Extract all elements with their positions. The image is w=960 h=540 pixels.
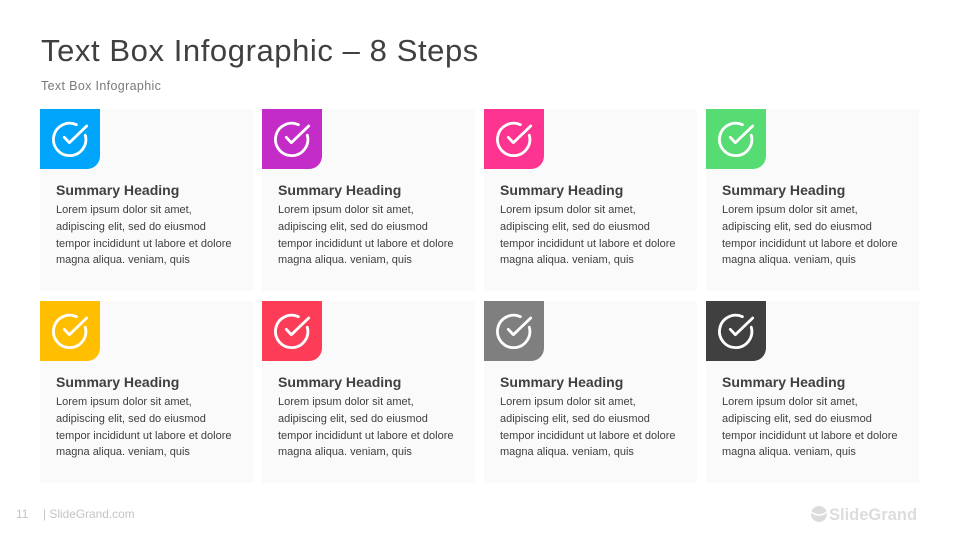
body text [278,396,454,458]
body text: Lorem ipsum dolor sit amet, [722,396,858,408]
body text: adipiscing elit, sed do eiusmod [56,221,206,233]
body text [500,204,676,266]
heading: Summary Heading [278,182,401,198]
heading: Summary Heading [500,182,623,198]
subtitle: Text Box Infographic [41,79,161,93]
body text [722,396,898,458]
body text: magna aliqua. veniam, quis [278,254,412,266]
body text: magna aliqua. veniam, quis [500,254,634,266]
body text: adipiscing elit, sed do eiusmod [56,413,206,425]
body text: tempor incididunt ut labore et dolore [56,238,232,250]
heading: Summary Heading [722,182,845,198]
body text: tempor incididunt ut labore et dolore [722,238,898,250]
icon: yellow check badge [40,301,100,361]
body text: adipiscing elit, sed do eiusmod [278,221,428,233]
panel: step 6 [262,301,475,483]
heading: Summary Heading [56,374,179,390]
icon: red check badge [262,301,322,361]
icon: blue check badge [40,109,100,169]
icon: dark check badge [706,301,766,361]
body text: magna aliqua. veniam, quis [278,446,412,458]
panel: step 4 [706,109,919,291]
body text [56,396,232,458]
heading: Summary Heading [500,374,623,390]
body text [278,204,454,266]
body text: adipiscing elit, sed do eiusmod [722,413,872,425]
panel: step 2 [262,109,475,291]
body text: tempor incididunt ut labore et dolore [278,430,454,442]
panel: step 3 [484,109,697,291]
icon: green check badge [706,109,766,169]
body text: adipiscing elit, sed do eiusmod [500,221,650,233]
body text [500,396,676,458]
page number: 11 [16,507,28,521]
body text: tempor incididunt ut labore et dolore [278,238,454,250]
body text: adipiscing elit, sed do eiusmod [722,221,872,233]
body text: magna aliqua. veniam, quis [56,254,190,266]
panel: step 8 [706,301,919,483]
body text: magna aliqua. veniam, quis [722,254,856,266]
body text: magna aliqua. veniam, quis [722,446,856,458]
body text: tempor incididunt ut labore et dolore [56,430,232,442]
body text: Lorem ipsum dolor sit amet, [500,396,636,408]
body text: magna aliqua. veniam, quis [500,446,634,458]
body text: Lorem ipsum dolor sit amet, [500,204,636,216]
body text: Lorem ipsum dolor sit amet, [56,396,192,408]
panel: step 5 [40,301,253,483]
body text: Lorem ipsum dolor sit amet, [56,204,192,216]
body text: tempor incididunt ut labore et dolore [500,238,676,250]
panel: step 1 [40,109,253,291]
icon: pink check badge [484,109,544,169]
body text: Lorem ipsum dolor sit amet, [722,204,858,216]
heading: Summary Heading [56,182,179,198]
body text: tempor incididunt ut labore et dolore [500,430,676,442]
body text: magna aliqua. veniam, quis [56,446,190,458]
heading: Summary Heading [722,374,845,390]
body text [56,204,232,266]
icon: purple check badge [262,109,322,169]
body text: Lorem ipsum dolor sit amet, [278,396,414,408]
body text: tempor incididunt ut labore et dolore [722,430,898,442]
heading: Summary Heading [278,374,401,390]
footer site: | SlideGrand.com [43,507,135,521]
panel: step 7 [484,301,697,483]
icon: grey check badge [484,301,544,361]
body text [722,204,898,266]
title: Text Box Infographic – 8 Steps [41,33,479,68]
body text: Lorem ipsum dolor sit amet, [278,204,414,216]
body text: adipiscing elit, sed do eiusmod [500,413,650,425]
body text: adipiscing elit, sed do eiusmod [278,413,428,425]
